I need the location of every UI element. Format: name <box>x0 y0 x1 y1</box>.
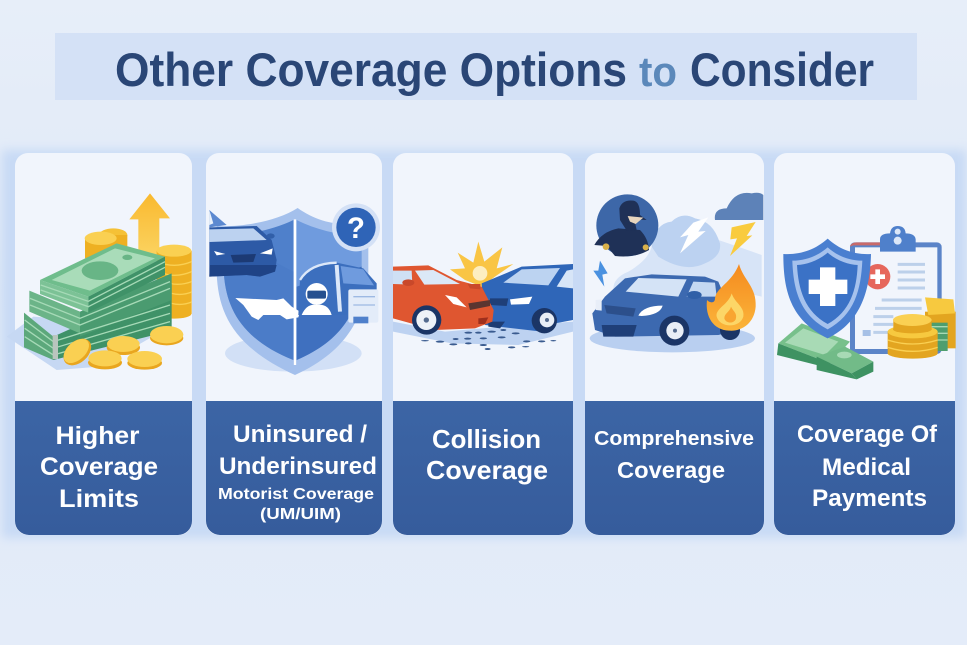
label: comprehensive coverage: Comprehensive <box>594 428 754 450</box>
label: uninsured / underinsured <box>218 421 377 523</box>
label: comprehensive coverage <box>594 428 754 483</box>
panel: coverage of medical payments <box>774 153 956 535</box>
icon: shield, car, truck and question badge: ? <box>347 212 365 245</box>
icon: money, coins and arrow <box>7 193 192 371</box>
label: higher coverage limits: Higher <box>56 422 140 450</box>
label: coverage of medical payments: Medical <box>822 454 911 481</box>
icon: two cars colliding <box>393 242 573 350</box>
label: uninsured / underinsured: Underinsured <box>219 453 377 480</box>
panel: comprehensive coverage <box>585 153 764 535</box>
label: higher coverage limits: Coverage <box>40 453 158 481</box>
panel: uninsured / underinsured motorist coverage <box>206 153 382 535</box>
label: higher coverage limits: Limits <box>59 485 139 513</box>
label: uninsured / underinsured: Motorist Coverage <box>218 486 374 503</box>
title: Consider <box>690 43 874 96</box>
label: uninsured / underinsured: Uninsured / <box>233 421 367 448</box>
icon: thief, storm, car and fire <box>590 193 763 352</box>
label: coverage of medical payments <box>797 421 938 512</box>
title: Other Coverage Options <box>115 43 627 96</box>
label: coverage of medical payments: Payments <box>812 485 927 512</box>
icon: shield, car, truck and question badge <box>209 203 380 375</box>
label: coverage of medical payments: Coverage Of <box>797 421 938 448</box>
label: collision coverage <box>426 424 548 485</box>
title band <box>55 33 917 100</box>
label: collision coverage: Collision <box>432 424 541 454</box>
icon: shield, clipboard, money and coins <box>777 226 956 379</box>
label: collision coverage: Coverage <box>426 455 548 485</box>
label: uninsured / underinsured: (UM/UIM) <box>260 506 341 523</box>
panel: higher coverage limits <box>7 153 192 535</box>
title: to <box>639 48 677 95</box>
panel: collision coverage <box>393 153 573 535</box>
label: comprehensive coverage: Coverage <box>617 457 725 483</box>
label: higher coverage limits <box>40 422 158 513</box>
